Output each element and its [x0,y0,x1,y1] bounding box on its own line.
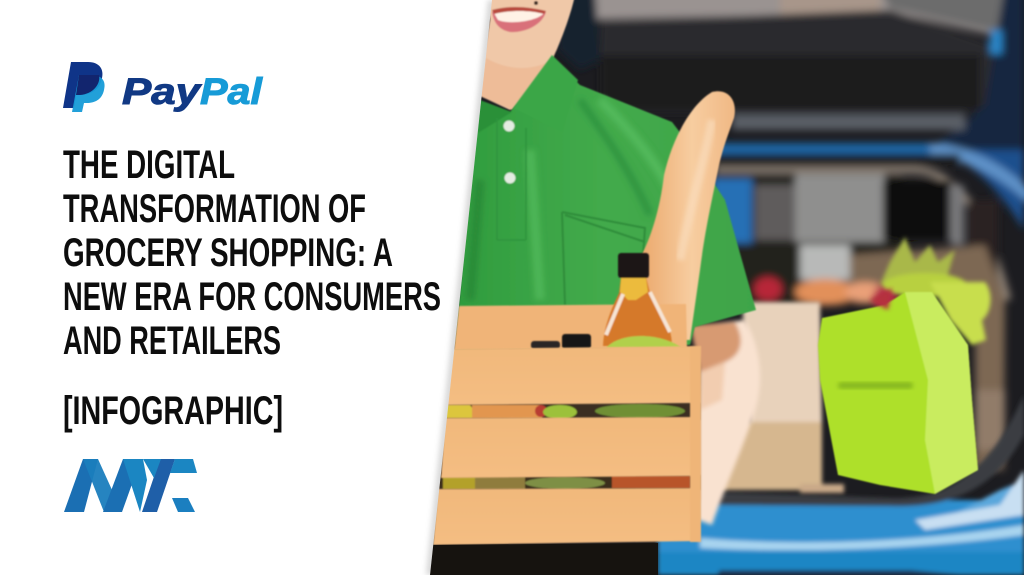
crate produce gaps [430,403,700,490]
green polo shirt [455,55,756,350]
beige trim [715,170,1008,300]
placket [497,118,526,240]
interior [712,176,902,306]
side pillar [555,0,600,70]
red, orange fruit [754,277,782,301]
baguette [640,91,735,340]
bottle [603,253,682,348]
shirt folds [470,100,670,300]
small jar lids [531,334,591,349]
buttons [504,120,514,132]
brown bags at back [850,245,1005,470]
arm [690,320,760,525]
green grocery bag [818,288,978,494]
title: THE DIGITAL [63,143,235,187]
title: GROCERY SHOPPING: A [63,231,393,275]
crate front slats [433,346,701,545]
trunk lip and bumper [658,395,1024,575]
paper bag and box [718,302,844,493]
collar [513,55,578,132]
logo: MTC [64,459,197,512]
logo: PayPal: Pal [200,71,263,112]
PayPal wordmark: Pay [122,71,203,112]
pants [428,543,658,575]
title [63,143,441,363]
crate back panel [454,304,687,350]
title: TRANSFORMATION OF [63,187,366,231]
grey and blue bands [732,114,965,130]
white diagonal panel [424,0,492,575]
title: AND RETAILERS [63,319,281,363]
upper opening of the trunk [590,0,1006,38]
PayPal monogram [63,62,105,112]
face and neck [478,0,575,110]
lips [492,8,546,32]
pineapple leaves and grapes [880,237,991,345]
pocket [562,212,645,305]
photo: background car trunk with groceries [430,0,1024,575]
title: NEW ERA FOR CONSUMERS [63,275,441,319]
raised lid [600,10,995,112]
logo: PayPal [63,62,263,112]
subtitle: infographic tag: [INFOGRAPHIC] [63,389,283,433]
photo: delivery person with crate [428,0,760,575]
